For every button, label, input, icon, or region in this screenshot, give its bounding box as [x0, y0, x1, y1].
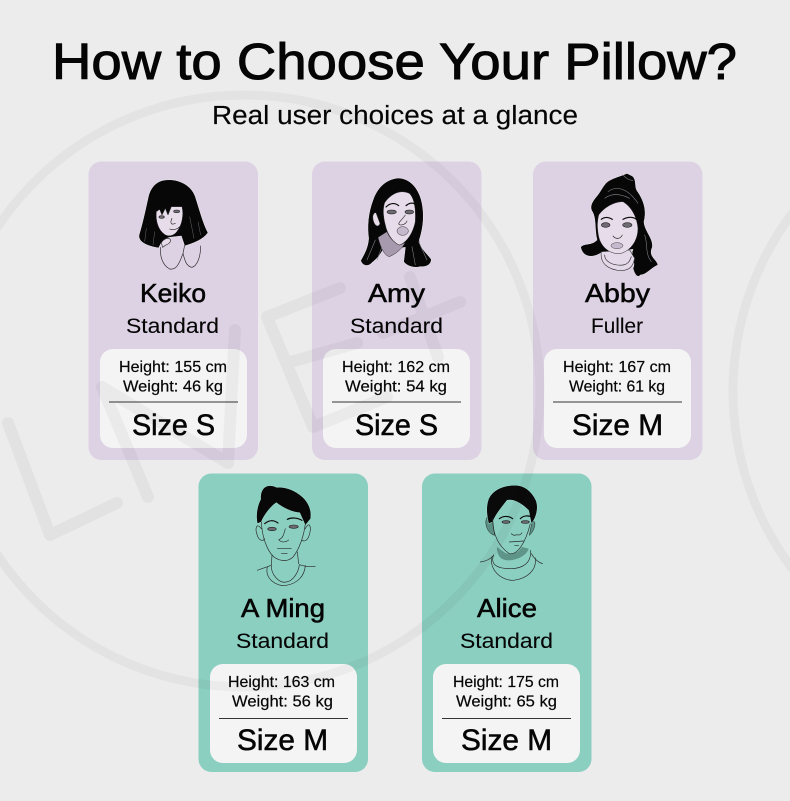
- name: Keiko: [140, 278, 206, 308]
- pillow type: Standard: [350, 315, 443, 338]
- size card: [323, 349, 470, 448]
- name: Abby: [585, 278, 650, 308]
- size card: Height: 167 cm: [563, 359, 671, 376]
- size card: Height: 175 cm: [453, 674, 559, 691]
- icon: Alice portrait: [480, 485, 543, 580]
- size card: Height: 162 cm: [342, 359, 450, 376]
- panel: Alice: [422, 474, 592, 772]
- subtitle: Real user choices at a glance: [212, 102, 578, 130]
- size card: Weight: 56 kg: [232, 694, 333, 710]
- size card: Size M: [237, 724, 328, 757]
- name: Amy: [368, 278, 425, 308]
- pillow type: Standard: [126, 315, 219, 338]
- name: A Ming: [241, 593, 325, 623]
- icon: Keiko portrait: [139, 180, 208, 269]
- icon: A Ming portrait: [256, 486, 315, 586]
- size card: Size M: [572, 409, 663, 442]
- size card: [100, 349, 247, 448]
- pillow type: Standard: [460, 630, 553, 653]
- panel: Abby: [533, 162, 702, 460]
- panel: Keiko: [88, 162, 258, 460]
- size card: Size M: [461, 724, 552, 757]
- size card: [433, 664, 580, 763]
- size card: Weight: 46 kg: [123, 378, 223, 396]
- size card: Weight: 65 kg: [456, 694, 557, 710]
- size card: Weight: 61 kg: [569, 378, 665, 396]
- pillow type: Fuller: [591, 315, 643, 338]
- size card: [544, 349, 691, 448]
- size card: [210, 664, 357, 763]
- size card: Size S: [355, 409, 438, 442]
- icon: Amy portrait: [361, 178, 431, 267]
- pillow type: Standard: [236, 630, 329, 653]
- name: Alice: [477, 593, 537, 623]
- panel: A Ming: [198, 474, 368, 772]
- size card: Size S: [132, 409, 215, 442]
- icon: Abby portrait: [581, 173, 658, 276]
- panel: Amy: [312, 162, 482, 460]
- size card: Height: 163 cm: [228, 674, 335, 691]
- size card: Height: 155 cm: [119, 359, 227, 376]
- watermark: [0, 95, 790, 687]
- size card: Weight: 54 kg: [345, 378, 447, 396]
- title: How to Choose Your Pillow?: [52, 33, 737, 90]
